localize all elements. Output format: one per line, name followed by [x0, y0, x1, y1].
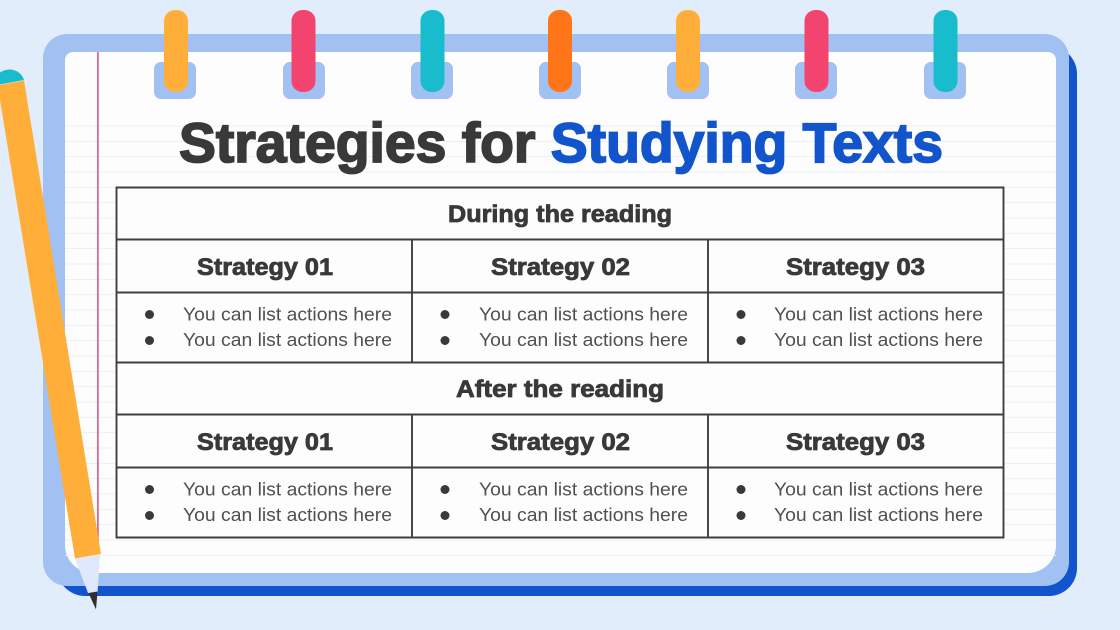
table grid: [116, 188, 1004, 538]
title: Strategies for Studying Texts: [179, 111, 943, 174]
pencil body: [0, 80, 101, 558]
actions list: during, strategy 02: [440, 304, 688, 350]
actions list: after, strategy 01: You can list actions here: [183, 478, 392, 500]
actions list: after, strategy 02: [440, 478, 688, 525]
column heading: strategy 03: Strategy 03: [786, 429, 925, 456]
actions list: after, strategy 01: [145, 478, 392, 525]
actions list: after, strategy 01: You can list actions here: [183, 504, 392, 525]
pencil lead: [88, 592, 98, 610]
actions list: after, strategy 02: You can list actions here: [479, 504, 688, 525]
actions list: during, strategy 03: [736, 304, 983, 350]
section heading: after the reading: After the reading: [456, 376, 664, 403]
actions list: during, strategy 03: You can list actions here: [774, 304, 983, 324]
actions list: during, strategy 02: You can list actions here: [479, 329, 688, 350]
actions list: during, strategy 01: You can list actions here: [183, 329, 392, 350]
actions list: during, strategy 01: [145, 304, 392, 350]
column heading: strategy 02: Strategy 02: [491, 254, 630, 281]
notebook page: [65, 52, 1056, 573]
ring 4: [539, 10, 581, 99]
actions list: during, strategy 03: You can list actions here: [774, 329, 983, 350]
actions list: after, strategy 02: You can list actions here: [479, 478, 688, 500]
table background: [116, 188, 1004, 538]
pencil eraser: [0, 69, 24, 84]
section heading: during the reading: During the reading: [448, 201, 672, 228]
column heading: strategy 01: Strategy 01: [197, 254, 333, 281]
actions list: after, strategy 03: You can list actions here: [774, 504, 983, 525]
ring 2: [283, 10, 325, 99]
icon: pencil: [0, 69, 101, 610]
strategy table: [116, 188, 1004, 538]
notebook back cover: [57, 46, 1077, 596]
actions list: during, strategy 01: You can list actions here: [183, 304, 392, 324]
ring 1: [154, 10, 196, 99]
column heading: strategy 01: Strategy 01: [197, 429, 333, 456]
column heading: strategy 02: Strategy 02: [491, 429, 630, 456]
ring 5: [667, 10, 709, 99]
actions list: during, strategy 02: You can list actions here: [479, 304, 688, 324]
ring 6: [795, 10, 837, 99]
margin line: [97, 52, 99, 547]
actions list: after, strategy 03: You can list actions here: [774, 478, 983, 500]
column heading: strategy 03: Strategy 03: [786, 254, 925, 281]
binder rings: [154, 10, 966, 99]
actions list: after, strategy 03: [736, 478, 983, 525]
ring 7: [924, 10, 966, 99]
pencil wood tip: [75, 555, 100, 593]
ring 3: [411, 10, 453, 99]
